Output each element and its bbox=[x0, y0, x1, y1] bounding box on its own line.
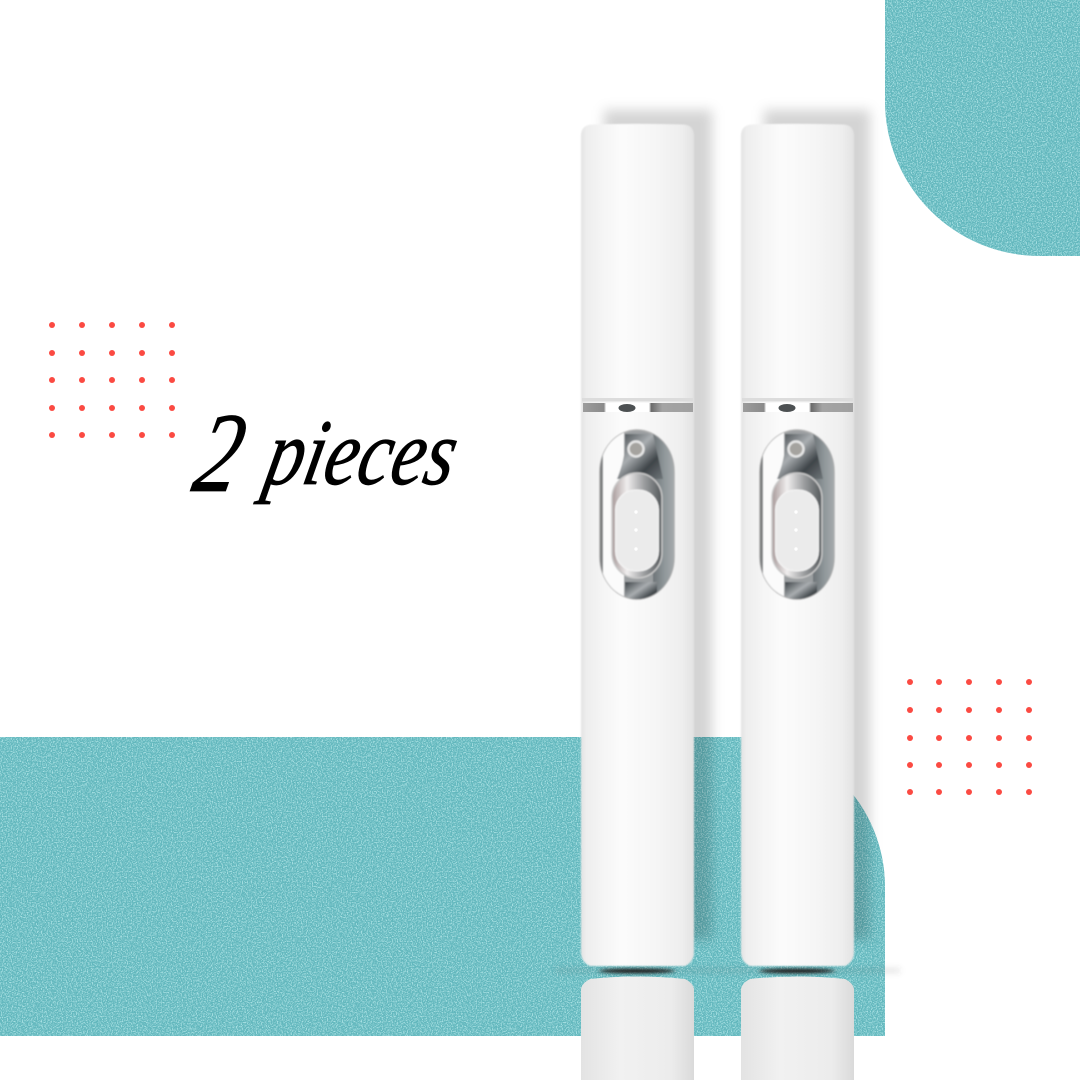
title: 2 pieces: 2 bbox=[185, 391, 256, 516]
title: 2 pieces: pieces bbox=[252, 400, 468, 505]
pen reflection: left bbox=[581, 976, 694, 1080]
panel: top-right teal corner shape bbox=[885, 0, 1080, 256]
pen shadows bbox=[604, 110, 870, 940]
dot grid: left bbox=[49, 322, 175, 438]
pen: right bbox=[741, 124, 854, 966]
panel: bottom teal band bbox=[0, 737, 885, 1036]
pen reflection: right bbox=[741, 976, 854, 1080]
dot grid: right bbox=[907, 679, 1032, 795]
title: 2 pieces bbox=[185, 391, 468, 516]
floor shadow bbox=[555, 968, 900, 973]
pen: left bbox=[581, 124, 694, 966]
